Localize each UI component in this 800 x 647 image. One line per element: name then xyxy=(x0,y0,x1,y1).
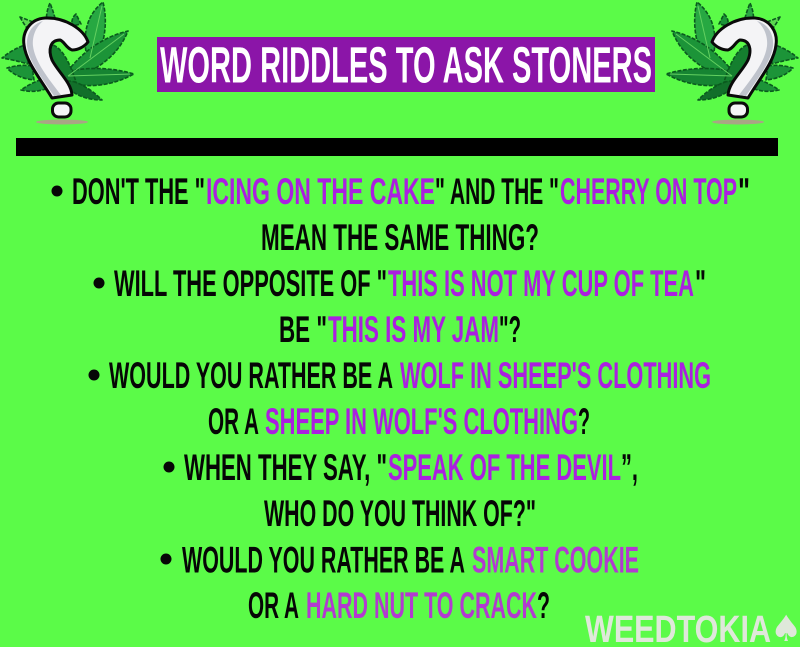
riddle 1 xyxy=(52,171,750,258)
riddle 4: WHO DO YOU THINK OF?" xyxy=(264,493,536,534)
riddle 1: ICING ON THE CAKE xyxy=(206,171,435,212)
riddle 3: OR A xyxy=(208,401,259,442)
riddle 4: SPEAK OF THE DEVIL xyxy=(388,447,621,488)
icon: cannabis leaf and question mark left xyxy=(2,2,134,124)
riddle 4: WHEN THEY SAY, " xyxy=(184,447,387,488)
riddle 5: SMART COOKIE xyxy=(472,540,639,580)
riddle 3: WOULD YOU RATHER BE A xyxy=(109,355,393,396)
riddle 2: BE " xyxy=(279,309,327,350)
divider bar xyxy=(16,138,778,156)
riddle 3 xyxy=(88,355,711,442)
riddle 2 xyxy=(94,263,706,350)
riddle 5: WOULD YOU RATHER BE A xyxy=(182,540,465,580)
riddle 4: ”, xyxy=(621,447,638,488)
riddle 1: MEAN THE SAME THING? xyxy=(261,217,539,258)
riddle 2: " xyxy=(695,263,706,304)
riddle 1: " AND THE " xyxy=(435,171,559,212)
riddle 2: "? xyxy=(499,309,521,350)
riddle 5: ? xyxy=(537,585,550,626)
riddle 2: THIS IS MY JAM xyxy=(328,309,499,350)
riddle 5: OR A xyxy=(248,585,299,626)
riddle 5: HARD NUT TO CRACK xyxy=(306,585,537,626)
icon: cannabis leaf and question mark right xyxy=(666,2,798,124)
riddle 5 xyxy=(160,540,639,626)
riddle 1: DON'T THE " xyxy=(72,171,205,212)
riddle 3: SHEEP IN WOLF'S CLOTHING xyxy=(265,401,578,442)
riddle 3: ? xyxy=(578,401,590,442)
riddle 1: " xyxy=(738,171,750,212)
riddle 4 xyxy=(164,447,638,534)
riddle 2: WILL THE OPPOSITE OF " xyxy=(114,263,387,304)
